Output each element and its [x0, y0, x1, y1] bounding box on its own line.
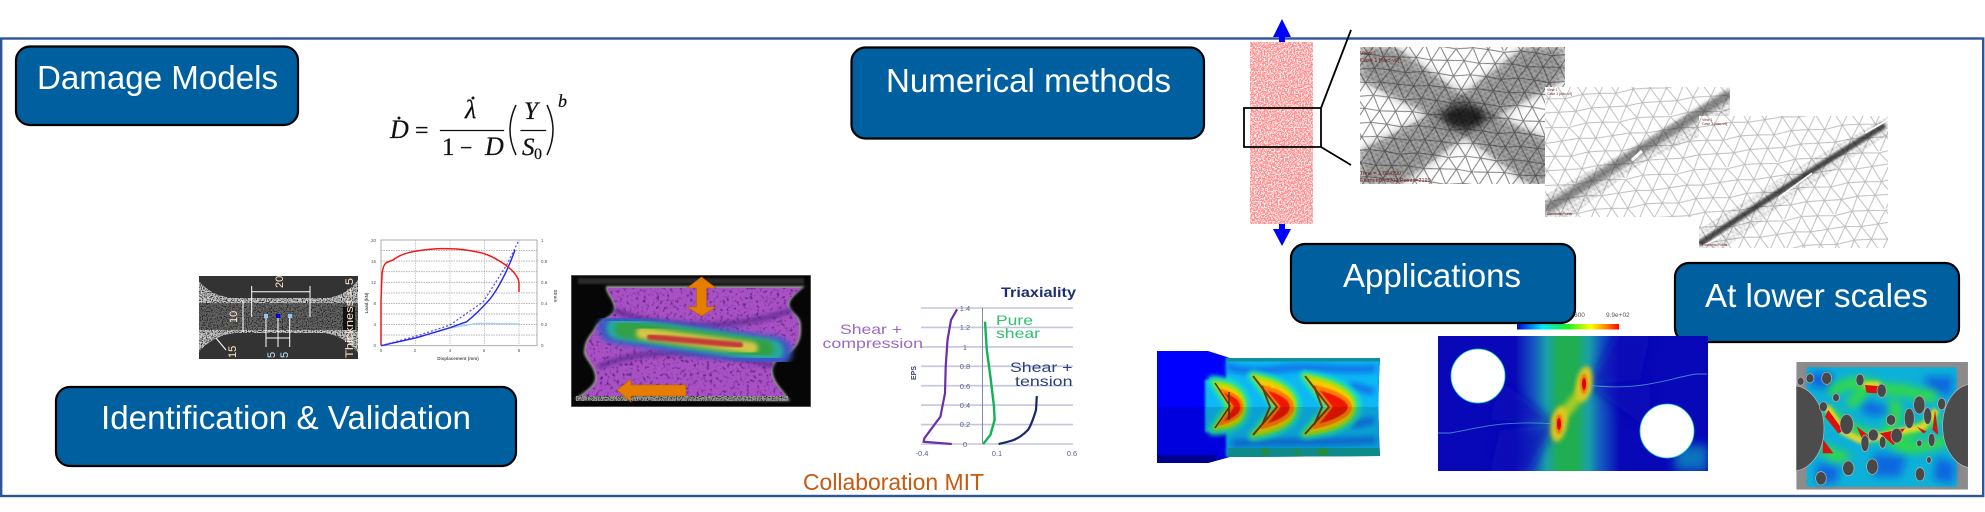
label: shear + compression: compression [822, 335, 923, 351]
chart: load and strain versus displacement: 0 [373, 343, 376, 348]
label: pure shear [996, 312, 1040, 341]
image: mesh with single diagonal shear band: Case 1 [disc-v9] [1547, 92, 1572, 96]
heading: Identification & Validation [56, 387, 516, 466]
image: mesh with crossed shear bands: View 1 [1360, 51, 1376, 57]
chart: load and strain versus displacement: 4 [373, 322, 376, 327]
damage evolution formula: D [484, 132, 504, 161]
heading: Applications [1291, 244, 1575, 323]
chart: triaxiality curves: 0.1 [992, 449, 1002, 458]
chart: load and strain versus displacement: 1 [541, 238, 544, 243]
chart: load and strain versus displacement: 16 [371, 259, 376, 264]
heading: Applications: Applications [1343, 257, 1521, 294]
colour scale bar: 9.9e+02 [1606, 312, 1630, 319]
image: mesh with crossed shear bands: Case 1 [disc-v9] [1360, 58, 1400, 64]
chart: load and strain versus displacement: Displacement (mm) [437, 356, 479, 361]
damage evolution formula: = [415, 118, 429, 144]
chart: load and strain versus displacement: 0.2 [541, 322, 548, 327]
image: mesh with single diagonal shear band: View 1 [1547, 88, 1557, 92]
image: mesh with crossed shear bands: Time = 1.024290 [1360, 171, 1401, 177]
image: mesh with developed diagonal crack [1699, 116, 1888, 248]
chart: load and strain versus displacement [364, 238, 558, 361]
heading: At lower scales: At lower scales [1705, 277, 1928, 314]
chart: triaxiality curves: -0.4 [916, 449, 928, 458]
chart: load and strain versus displacement: 8 [373, 301, 376, 306]
chevron 1 [1213, 381, 1245, 430]
curve: dotted blue strain [381, 240, 519, 346]
curve: solid blue strain [381, 250, 515, 346]
label: shear + tension [1010, 359, 1072, 389]
label: shear + compression: Shear + [840, 321, 902, 337]
damage evolution formula: Y [524, 98, 541, 125]
chart: load and strain versus displacement: 0.6 [541, 280, 548, 285]
curve: pure shear [983, 322, 995, 444]
chart: load and strain versus displacement: 20 [371, 238, 376, 243]
chart: load and strain versus displacement: 4 [449, 348, 452, 353]
label: pure shear: Pure [996, 312, 1033, 328]
label: shear + compression [822, 321, 923, 351]
chart: load and strain versus displacement: 0.8 [541, 259, 548, 264]
curve: light blue strain [381, 323, 519, 346]
image: specimen photo with dimensions: Thickness = 5 [344, 278, 356, 358]
damage evolution formula: b [558, 91, 567, 111]
colour scale bar [1517, 312, 1630, 330]
icon: vertical orange double arrow [687, 277, 716, 316]
heading: Identification & Validation: Identification & Validation [101, 399, 471, 436]
image: microstructure strain map with particles [1796, 362, 1968, 490]
image: mesh with developed diagonal crack: Case 1 [disc-v9] [1702, 122, 1727, 126]
chart: triaxiality curves: EPS [911, 366, 918, 380]
label: shear + tension: Shear + [1010, 359, 1072, 375]
damage evolution formula: D [389, 115, 409, 144]
chart: load and strain versus displacement: Load (kN) [364, 292, 369, 313]
damage evolution formula: λ [464, 95, 476, 124]
label: Collaboration MIT: Collaboration MIT [803, 469, 984, 495]
image: mesh with crossed shear bands [1360, 47, 1565, 184]
curve: shear + tension [999, 396, 1037, 444]
chart: triaxiality curves: 1.2 [960, 323, 970, 332]
chevron 3 [1305, 376, 1356, 434]
heading: Numerical methods [852, 48, 1204, 138]
chart: load and strain versus displacement: 2 [414, 348, 417, 353]
heading: Damage Models: Damage Models [37, 59, 278, 96]
icon: top blue arrow [1273, 19, 1291, 42]
chart: load and strain versus displacement: Strain [553, 290, 558, 303]
label: pure shear: shear [996, 325, 1040, 341]
damage evolution formula: 0 [534, 146, 542, 163]
chart: load and strain versus displacement: 6 [483, 348, 486, 353]
zoom window with leader lines [1244, 30, 1351, 165]
image: mesh with single diagonal shear band: Elements Points [1547, 212, 1573, 216]
image: mesh with crossed shear bands: Elements=3202 Points=2199 [1360, 178, 1431, 184]
chart: triaxiality curves: 1.4 [960, 304, 970, 313]
chart: triaxiality curves: 0.4 [960, 401, 970, 410]
chart: triaxiality curves: 0.6 [960, 382, 970, 391]
image: DIC strain field of sheared specimen [571, 275, 811, 407]
image: mesh with single diagonal shear band [1545, 87, 1730, 217]
image: mesh with developed diagonal crack: Elements Points [1702, 243, 1728, 247]
chart: triaxiality curves: 0.6 [1067, 449, 1077, 458]
chart: load and strain versus displacement: 8 [518, 348, 521, 353]
heading: Numerical methods: Numerical methods [886, 62, 1171, 99]
image: specimen photo with dimensions: 15 [227, 346, 239, 358]
image: specimen photo with dimensions: 5 [279, 352, 291, 358]
chart: load and strain versus displacement: 12 [371, 280, 376, 285]
chart: load and strain versus displacement: 0.4 [541, 301, 548, 306]
image: red speckled tensile specimen [1250, 42, 1313, 224]
image: mesh with developed diagonal crack: View 1 [1702, 118, 1712, 122]
label: shear + tension: tension [1015, 373, 1072, 389]
chevron 2 [1253, 376, 1296, 436]
chart: triaxiality curves: 1 [963, 343, 967, 352]
icon: horizontal orange arrow [617, 379, 686, 402]
image: specimen photo with dimensions: 20 [274, 276, 286, 288]
colour scale bar: 600 [1574, 312, 1585, 319]
damage evolution formula: 1 [442, 134, 454, 161]
curve: shear + compression [924, 309, 957, 444]
damage evolution formula: − [460, 135, 472, 160]
chart: load and strain versus displacement: 0 [380, 348, 383, 353]
heading: At lower scales [1675, 263, 1959, 342]
curve: red load [381, 249, 519, 345]
chart: triaxiality curves: 0.8 [960, 362, 970, 371]
image: specimen photo with dimensions: 5 [266, 352, 278, 358]
image: tube with chevron cracks [1157, 351, 1380, 463]
image: specimen photo with dimensions [199, 276, 358, 359]
image: plate with two holes stress field [1438, 336, 1708, 471]
chart: triaxiality curves: 0.2 [960, 420, 970, 429]
chart: triaxiality curves: 0 [963, 440, 967, 449]
chart: triaxiality curves: Triaxiality [1001, 284, 1076, 300]
chart: load and strain versus displacement: 0 [541, 343, 544, 348]
heading: Damage Models [16, 46, 298, 125]
chart: triaxiality curves [822, 284, 1077, 458]
icon: bottom blue arrow [1273, 224, 1291, 246]
damage evolution formula: S [522, 134, 535, 161]
image: specimen photo with dimensions: 10 [228, 311, 240, 323]
damage evolution formula [389, 91, 567, 163]
